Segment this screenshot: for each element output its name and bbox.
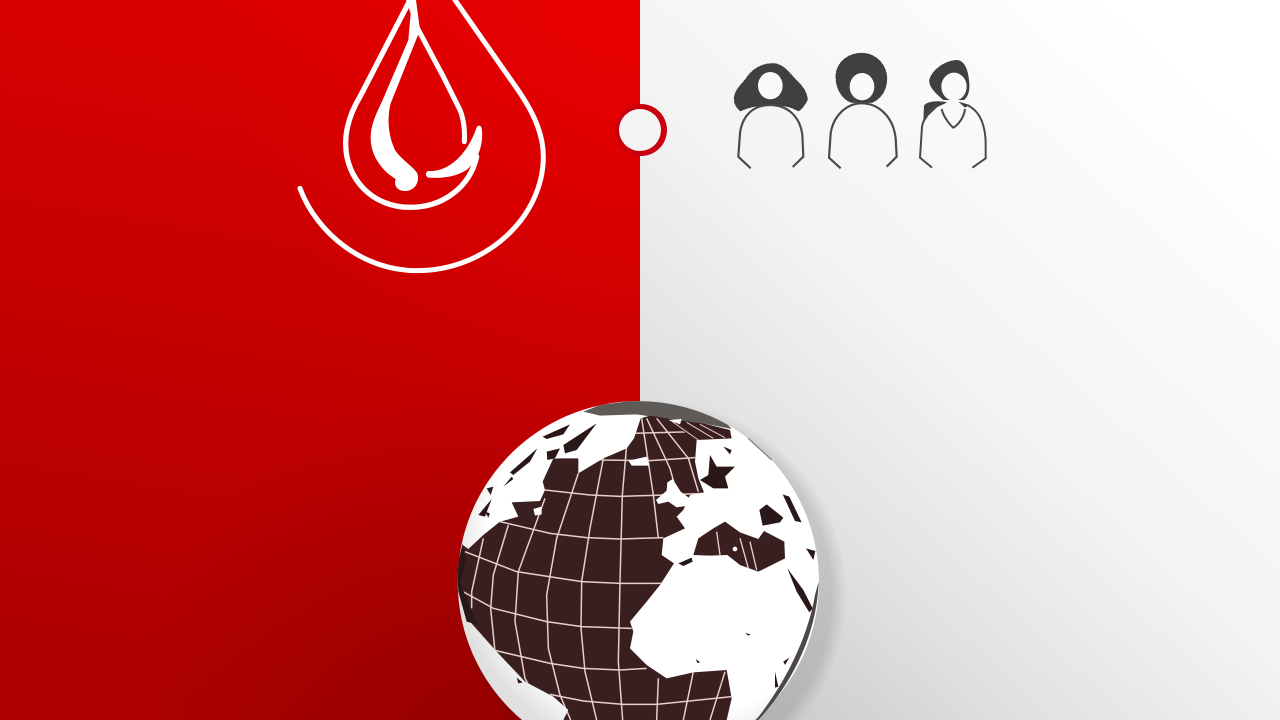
panel: light grey background (640, 0, 1280, 720)
globe (457, 400, 819, 720)
panel: red background (0, 0, 640, 720)
person 1 (735, 64, 807, 168)
polar cap (583, 400, 732, 429)
icon: blood drop (300, 0, 543, 271)
graticule (460, 418, 732, 720)
icon: connector dot (615, 104, 667, 156)
person 2 (829, 54, 897, 168)
land islands (628, 457, 649, 466)
icon: three people (735, 54, 986, 168)
north american arctic (457, 423, 789, 688)
globe shadow (457, 400, 847, 720)
atlantic ocean (457, 416, 732, 720)
globe rim shading (756, 582, 819, 720)
person 3 (920, 60, 986, 168)
mediterranean and inland seas (678, 447, 815, 612)
